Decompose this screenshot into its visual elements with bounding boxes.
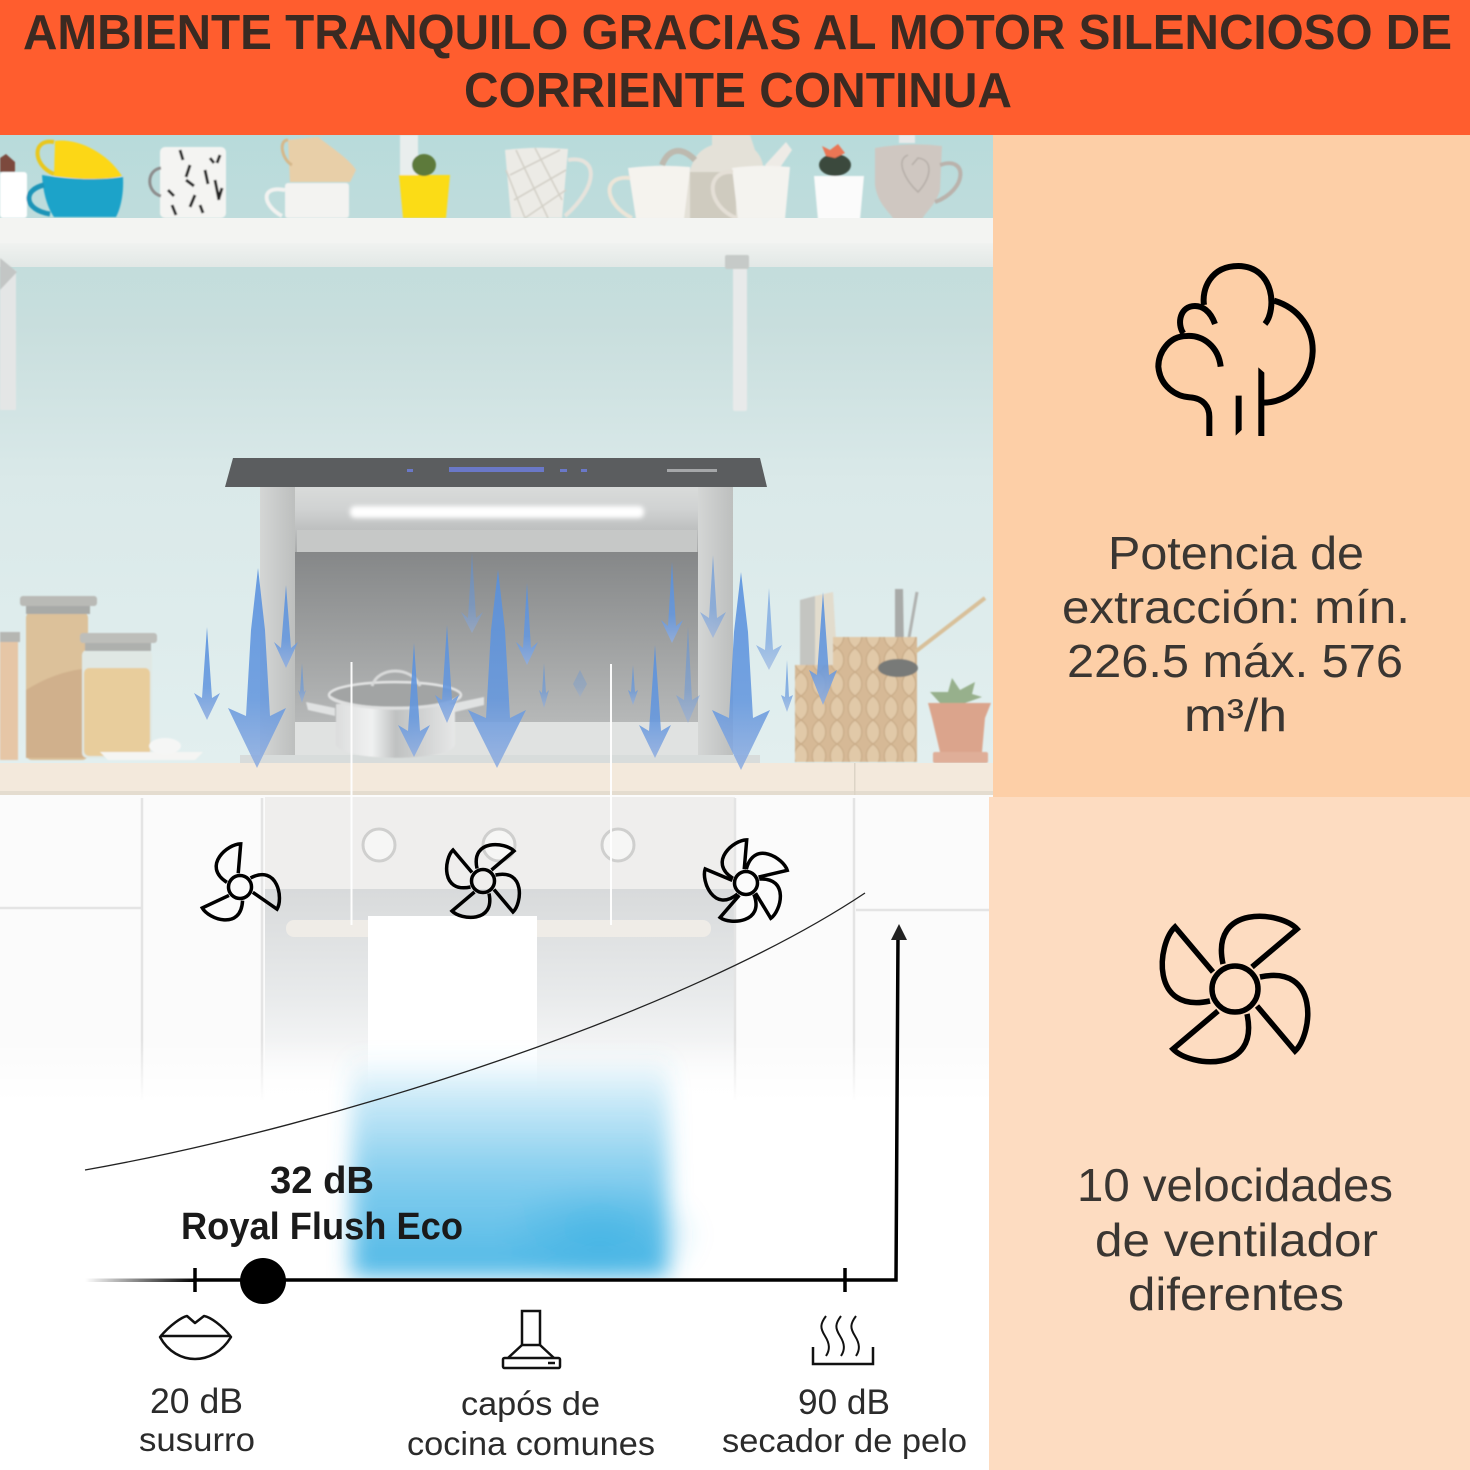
- title: [23, 6, 1452, 118]
- cooking pot: [306, 671, 484, 758]
- title: CORRIENTE CONTINUA: [464, 64, 1012, 118]
- title: AMBIENTE TRANQUILO GRACIAS AL MOTOR SILENCIOSO DE: [23, 6, 1452, 60]
- label: 20 dB susurro: 20 dB: [150, 1382, 243, 1421]
- icon: steam: [813, 1316, 873, 1364]
- label: capós de cocina comunes: cocina comunes: [407, 1425, 655, 1462]
- label: 20 dB susurro: [139, 1382, 255, 1458]
- basket and utensils: [795, 589, 985, 762]
- header banner: [0, 0, 1470, 135]
- extraction text: m³/h: [1184, 689, 1287, 741]
- label: capós de cocina comunes: [407, 1385, 655, 1462]
- oven knobs: [363, 829, 634, 861]
- panel: fan speeds: [989, 797, 1470, 1470]
- fan icon: three blades: [201, 839, 283, 924]
- plant pot: [928, 678, 991, 763]
- extraction text: [1062, 527, 1410, 741]
- icon: range hood: [503, 1311, 560, 1368]
- control panel: [407, 467, 717, 472]
- hood glass top: [225, 458, 767, 487]
- shelf: [0, 218, 993, 267]
- fan speeds text: 10 velocidades: [1077, 1159, 1393, 1211]
- shelf brackets: [0, 255, 749, 411]
- shelf items: cups and plants: [0, 135, 960, 220]
- hood backsplash: [295, 552, 698, 722]
- hood bar: [297, 530, 697, 552]
- highlight label: 32 dB Royal Flush Eco: 32 dB: [270, 1160, 374, 1202]
- hood interior: [295, 487, 698, 552]
- white vertical lines: [352, 662, 611, 925]
- hood: [225, 458, 767, 763]
- fan speeds text: [1077, 1159, 1393, 1320]
- fade to white: [0, 1040, 993, 1102]
- blue glow: [352, 1055, 700, 1290]
- cabinets and oven: [0, 795, 993, 1106]
- label: 90 dB secador de pelo: secador de pelo: [722, 1422, 967, 1459]
- towel: [368, 916, 537, 1106]
- hood counter shadow: [240, 755, 760, 763]
- noise curve: [85, 893, 865, 1170]
- axis arrowhead: [891, 924, 907, 940]
- fan icon: four blades: [447, 845, 519, 917]
- jars: [0, 596, 203, 760]
- axis ticks: [195, 1268, 845, 1292]
- marker dot: [240, 1258, 286, 1304]
- hood lamp: [350, 506, 644, 518]
- oven front: [265, 797, 735, 889]
- label: capós de cocina comunes: capós de: [461, 1385, 600, 1422]
- hood base: [295, 722, 698, 755]
- panel: extraction power: [993, 135, 1470, 797]
- icon: smoke cloud: [1158, 266, 1313, 436]
- kitchen photo: [0, 135, 993, 1278]
- fan icon: five blades: [700, 835, 790, 924]
- hood side columns: [260, 487, 295, 757]
- cabinet edges: [0, 798, 990, 1100]
- extraction text: 226.5 máx. 576: [1067, 635, 1403, 687]
- highlight label: 32 dB Royal Flush Eco: [181, 1160, 463, 1248]
- fan speeds text: diferentes: [1128, 1268, 1344, 1320]
- fan speeds text: de ventilador: [1095, 1214, 1378, 1266]
- label: 90 dB secador de pelo: [722, 1383, 967, 1459]
- icon: fan: [1162, 916, 1308, 1062]
- blue airflow arrows: [194, 553, 837, 770]
- icon: lips: [160, 1316, 231, 1359]
- label: 90 dB secador de pelo: 90 dB: [798, 1383, 890, 1422]
- highlight label: 32 dB Royal Flush Eco: Royal Flush Eco: [181, 1206, 463, 1248]
- countertop: [0, 763, 993, 795]
- extraction text: Potencia de: [1108, 527, 1364, 579]
- label: 20 dB susurro: susurro: [139, 1421, 255, 1458]
- oven handle: [286, 920, 711, 937]
- extraction text: extracción: mín.: [1062, 581, 1410, 633]
- wall: [0, 135, 993, 765]
- noise axis: [85, 924, 907, 1304]
